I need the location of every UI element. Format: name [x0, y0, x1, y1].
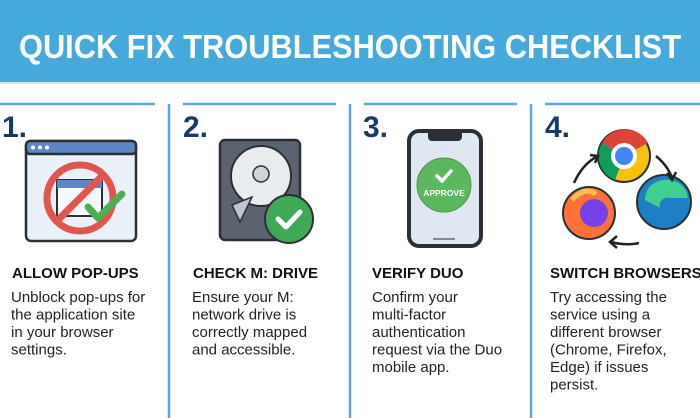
text block: Unblock pop-ups for — [11, 289, 145, 306]
icon: hard drive with check — [220, 140, 313, 243]
heading: SWITCH BROWSERS — [550, 265, 700, 282]
panel: switch browsers — [545, 111, 700, 394]
text block: the application site — [11, 306, 135, 324]
panel: verify duo — [363, 111, 502, 376]
number 1: 1. — [2, 111, 27, 144]
icon: blocked popup window — [26, 141, 136, 241]
heading: CHECK M: DRIVE — [193, 265, 318, 282]
panel: check M drive — [183, 111, 318, 358]
number 2: 2. — [183, 111, 208, 144]
text block: network drive is — [192, 306, 296, 324]
text block: different browser — [550, 324, 661, 341]
text block: Confirm your — [372, 289, 458, 306]
text block: Edge) if issues — [550, 359, 648, 376]
text block: Ensure your M: — [192, 289, 294, 306]
icon: browsers cycle — [563, 129, 691, 248]
number 4: 4. — [545, 111, 570, 144]
heading: VERIFY DUO — [372, 265, 464, 282]
number 3: 3. — [363, 111, 388, 144]
text block: Try accessing the — [550, 289, 667, 306]
icon: phone approve: APPROVE — [423, 188, 465, 198]
panel: allow pop-ups — [2, 111, 145, 358]
icon: phone approve — [409, 131, 481, 246]
text block: and accessible. — [192, 342, 295, 358]
header band — [0, 0, 700, 84]
text block: (Chrome, Firefox, — [550, 342, 667, 358]
text block: in your browser — [11, 324, 114, 341]
heading: ALLOW POP-UPS — [12, 265, 139, 282]
text block: request via the Duo — [372, 342, 502, 358]
text block: settings. — [11, 342, 67, 358]
text block: service using a — [550, 306, 651, 324]
text block: persist. — [550, 376, 598, 394]
text block: correctly mapped — [192, 324, 307, 341]
text block: multi-factor — [372, 306, 446, 324]
text block: mobile app. — [372, 359, 450, 376]
text block: authentication — [372, 324, 465, 341]
